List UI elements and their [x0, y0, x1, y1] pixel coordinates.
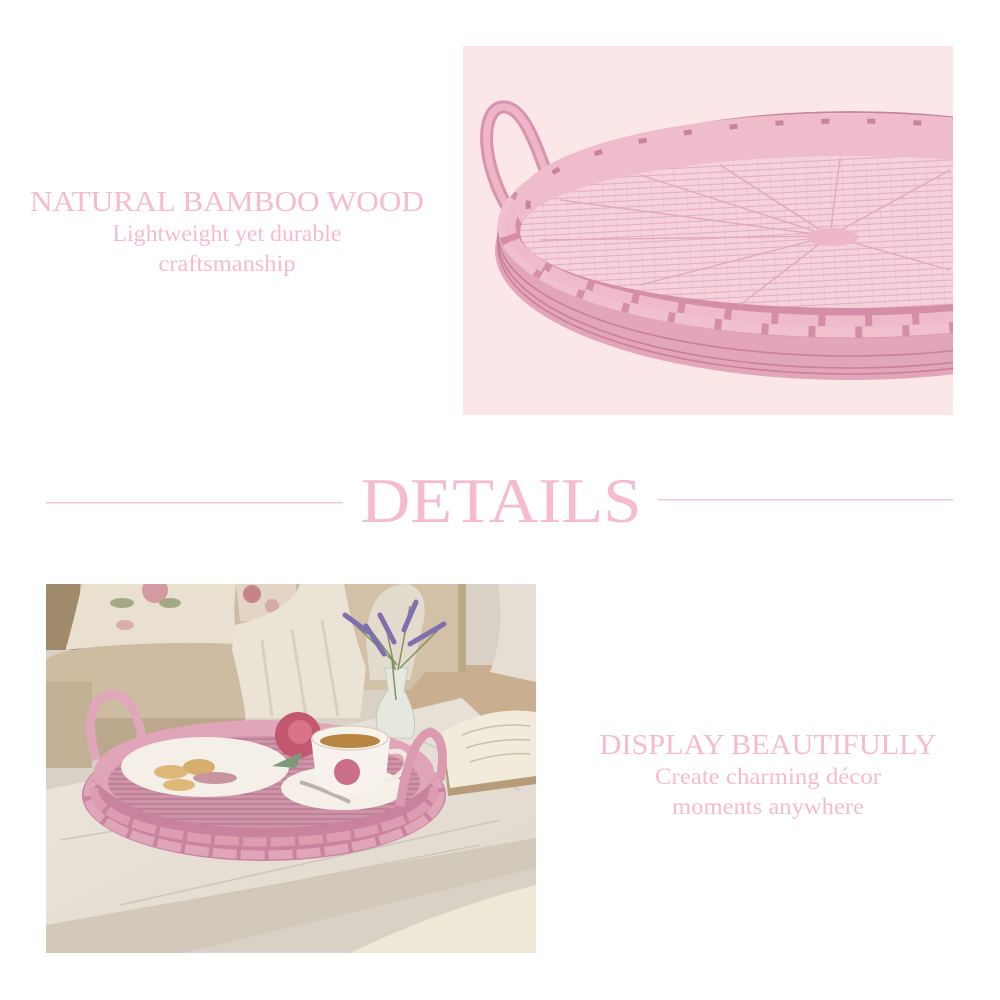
tray rim	[94, 720, 434, 800]
coffee table	[46, 698, 536, 925]
floor	[405, 665, 536, 716]
photo: pink woven tray close-up	[463, 46, 1000, 415]
tray wall strands	[498, 112, 1000, 374]
tray woven base	[520, 156, 1000, 308]
description: Lightweight yet durable	[112, 221, 342, 246]
teacup	[311, 726, 406, 796]
spoon	[300, 782, 350, 802]
text block: natural bamboo wood	[30, 186, 424, 276]
round cushion	[366, 584, 425, 680]
section title: details: DETAILS	[360, 466, 642, 536]
pink tray	[82, 694, 446, 861]
heading: DISPLAY BEAUTIFULLY	[600, 730, 936, 761]
floral pillow	[66, 584, 236, 650]
description	[655, 764, 881, 819]
heading: NATURAL BAMBOO WOOD	[30, 186, 424, 218]
icon: tray handle	[487, 107, 546, 215]
tray centre	[806, 228, 858, 246]
saucer	[281, 766, 405, 810]
tray wall	[82, 772, 446, 861]
glass vase	[376, 668, 415, 738]
curtain	[490, 584, 536, 682]
wall	[46, 584, 536, 953]
tray outer wall	[495, 235, 953, 380]
peony	[272, 712, 321, 768]
description: moments anywhere	[672, 794, 864, 819]
open book	[442, 711, 536, 796]
tray base spokes	[540, 158, 950, 305]
sofa	[46, 584, 466, 768]
tray braided rim	[500, 191, 953, 338]
tray base	[108, 736, 420, 828]
right handle	[400, 732, 442, 806]
second pillow	[236, 584, 296, 622]
lavender stems	[345, 602, 444, 700]
tray upper rim	[516, 113, 953, 224]
rug	[350, 885, 536, 953]
table front edge	[46, 838, 536, 953]
description: craftsmanship	[158, 251, 296, 276]
text block: display beautifully	[600, 730, 936, 819]
description	[112, 221, 342, 276]
left handle	[91, 694, 142, 760]
description: Create charming décor	[655, 764, 881, 789]
plate with cookies	[121, 737, 289, 797]
photo: tray on coffee table	[46, 577, 536, 953]
throw blanket	[232, 584, 366, 718]
